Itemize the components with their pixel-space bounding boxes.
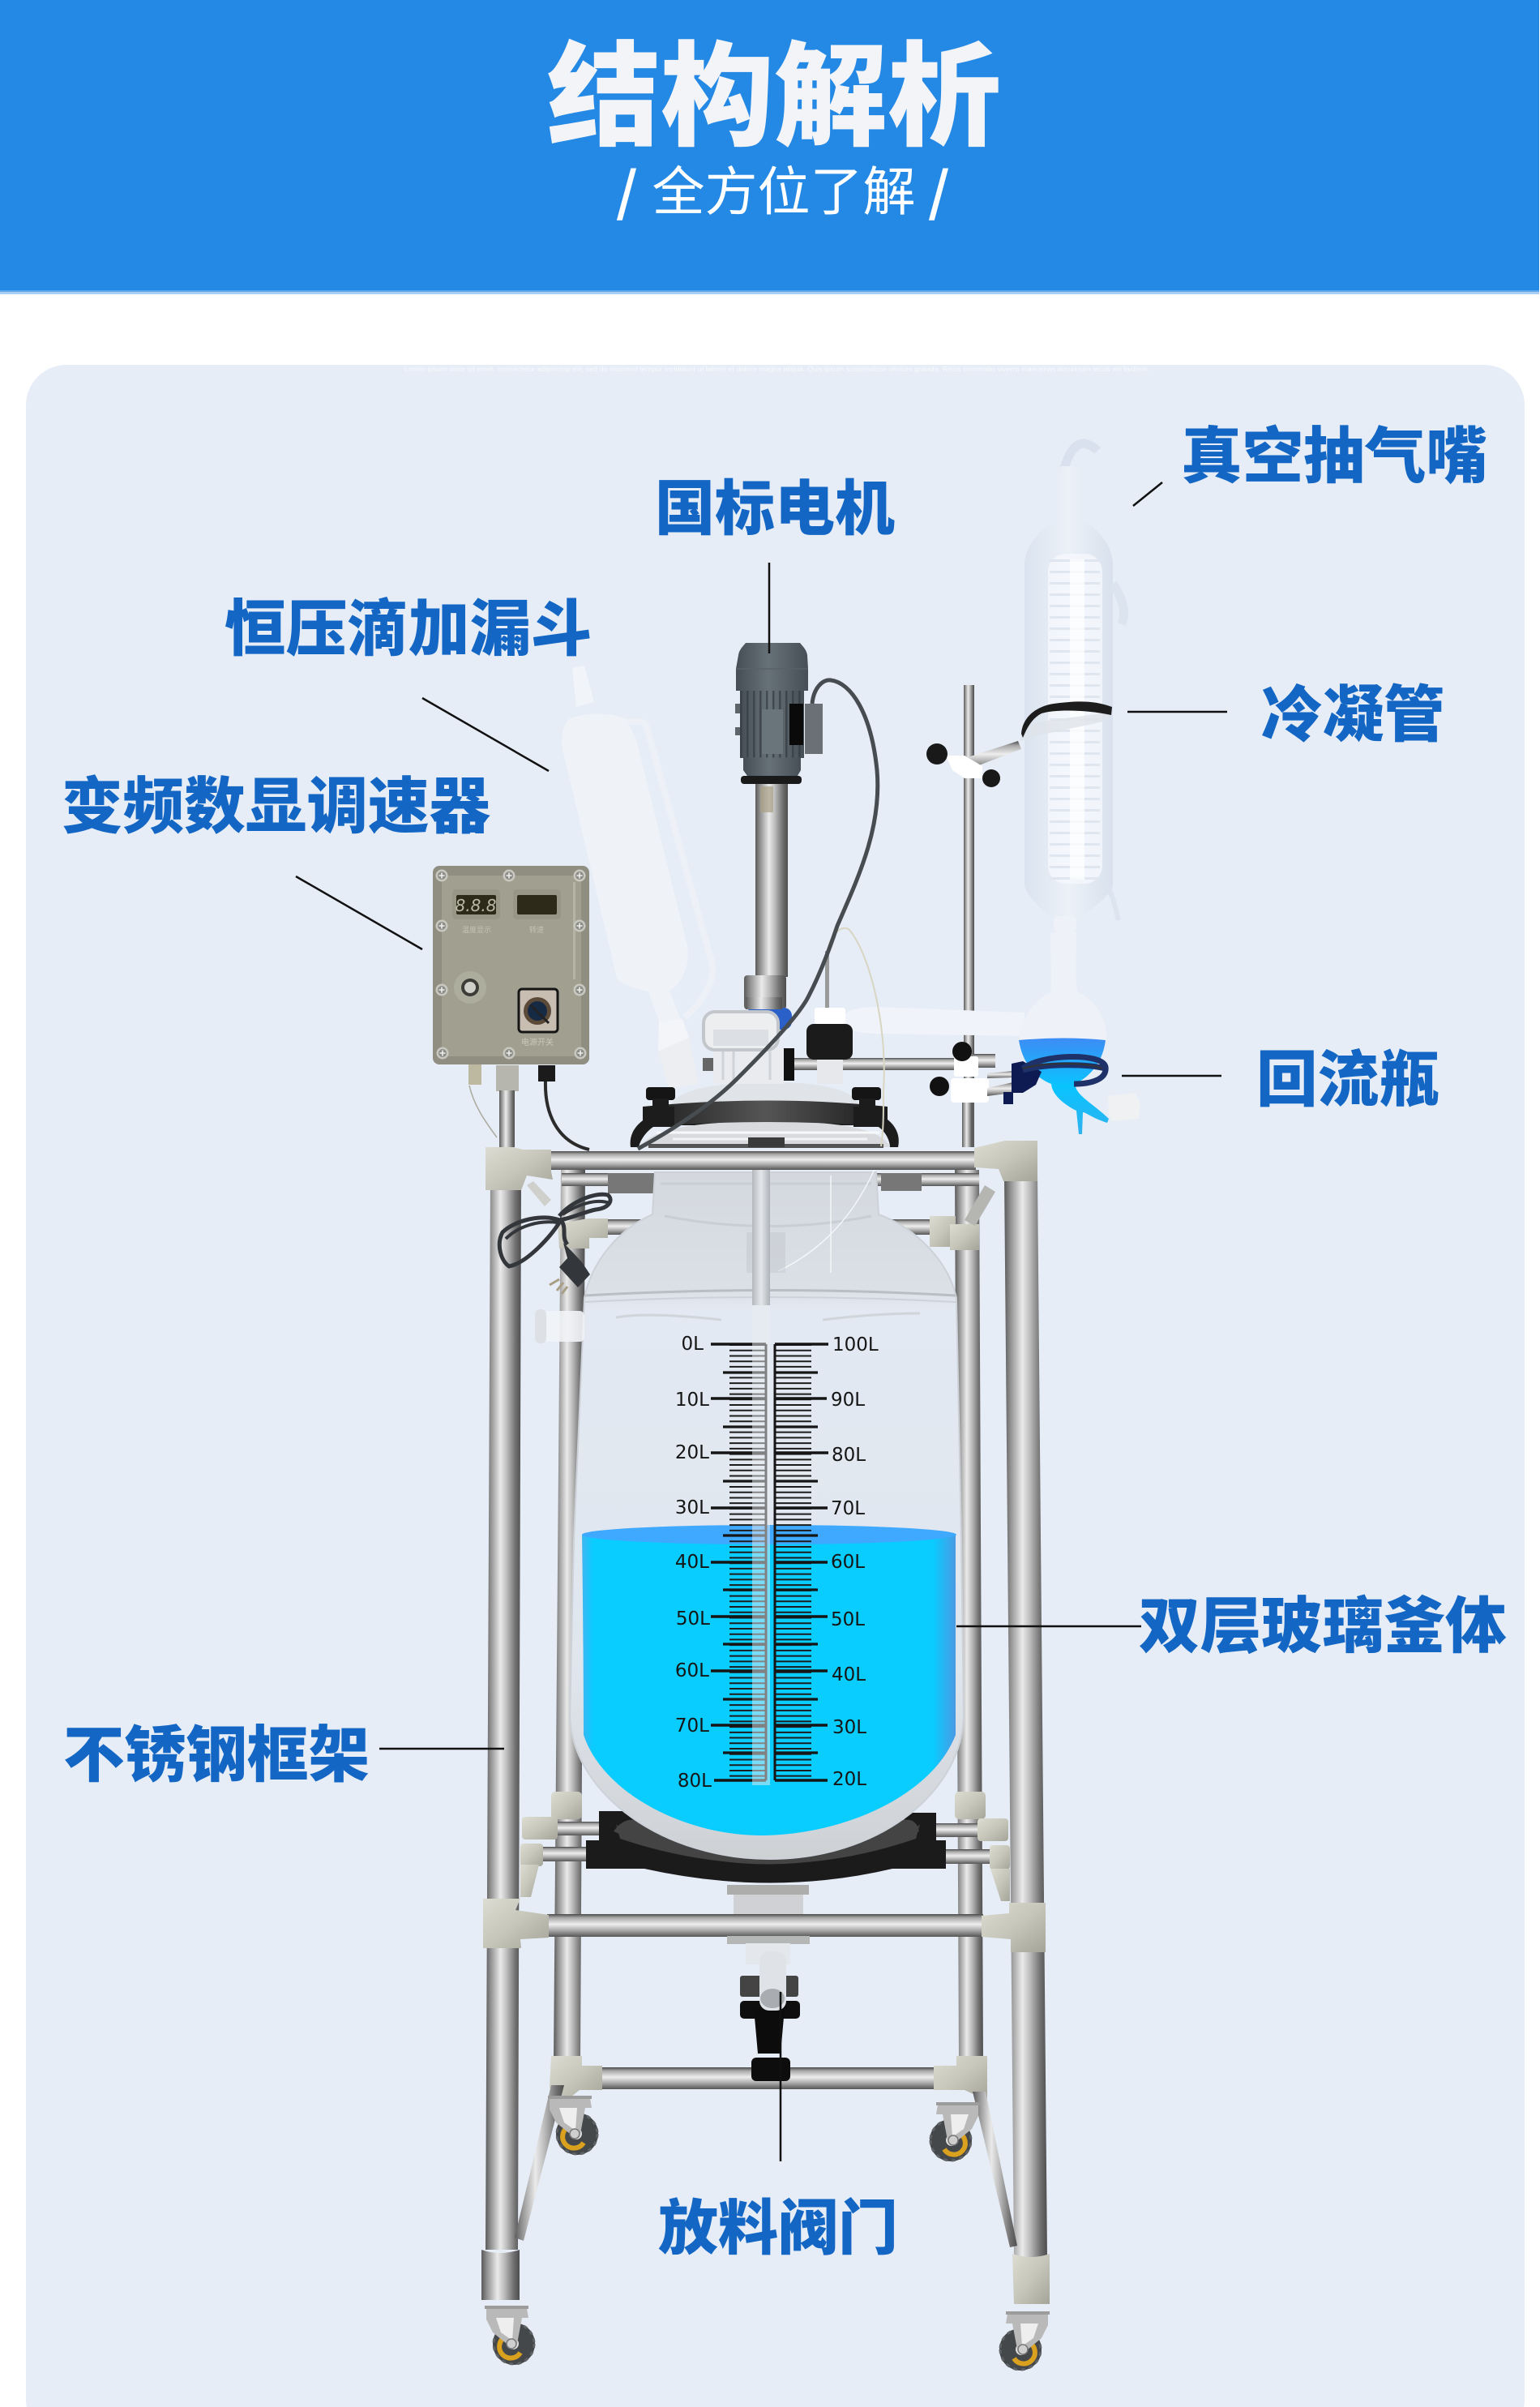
label: 回流瓶: 回流瓶 bbox=[1256, 1047, 1440, 1115]
label: 放料阀门: 放料阀门 bbox=[658, 2195, 898, 2262]
leader line: motor bbox=[768, 563, 770, 653]
panel captions: 温度显示 bbox=[462, 925, 491, 934]
left brace bbox=[515, 2085, 564, 2241]
leader line: valve bbox=[780, 1992, 781, 2161]
reactor: back frame bbox=[520, 1170, 1010, 2062]
label: 不锈钢框架: 不锈钢框架 bbox=[63, 1722, 370, 1790]
condenser coil bbox=[1048, 554, 1102, 884]
reactor: blue liquid bbox=[582, 1525, 956, 1835]
middle right joint bbox=[982, 1903, 1046, 1952]
thermometer port bbox=[806, 928, 884, 1146]
label: 变频数显调速器: 变频数显调速器 bbox=[62, 773, 491, 842]
reflux flask bbox=[842, 916, 1140, 1134]
scale labels right: 100L bbox=[832, 1334, 879, 1356]
leader line: condenser bbox=[1127, 711, 1227, 713]
leader line: vacuum nozzle bbox=[1133, 482, 1162, 506]
title: 结构解析 bbox=[547, 33, 1001, 161]
scale labels right: 60L bbox=[831, 1552, 865, 1573]
reactor: vessel saddle bbox=[586, 1811, 946, 1882]
scale labels left: 60L bbox=[675, 1660, 709, 1681]
lower left joint bbox=[550, 2056, 602, 2100]
middle left joint bbox=[483, 1899, 549, 1948]
scale labels left: 70L bbox=[675, 1715, 709, 1737]
motor shaft bbox=[744, 782, 788, 1009]
label: 双层玻璃釜体: 双层玻璃釜体 bbox=[1139, 1593, 1507, 1661]
temperature digits: 8.8.8 bbox=[456, 896, 496, 915]
motor body bbox=[735, 643, 823, 784]
lower crossbar bbox=[601, 2067, 935, 2089]
top right joint bbox=[974, 1141, 1037, 1181]
motor cable bbox=[638, 680, 878, 1149]
discharge valve bbox=[727, 1885, 810, 2081]
lid clamp band bbox=[643, 1101, 888, 1127]
stirring motor bbox=[735, 643, 823, 1009]
scale labels right: 70L bbox=[831, 1498, 865, 1519]
speed controller box bbox=[433, 866, 589, 1150]
scale labels right: 30L bbox=[832, 1717, 866, 1738]
scale labels left: 10L bbox=[675, 1390, 709, 1411]
scale labels left: 50L bbox=[676, 1608, 710, 1630]
controller connectors bbox=[468, 1064, 589, 1150]
retort stand rod bbox=[964, 685, 974, 1147]
leader line: flask bbox=[1122, 1075, 1221, 1077]
scale labels right: 40L bbox=[832, 1664, 866, 1685]
power plug bbox=[550, 1243, 590, 1294]
left outer leg bbox=[486, 1176, 521, 2250]
constant-pressure dropping funnel bbox=[562, 666, 712, 1089]
left foot collar bbox=[481, 2250, 520, 2300]
subtitle: / bbox=[929, 156, 949, 235]
label: 国标电机: 国标电机 bbox=[655, 475, 895, 542]
scale labels right: 50L bbox=[831, 1609, 865, 1630]
reactor: glass vessel bbox=[535, 1167, 964, 1859]
reactor: central stirring rod bbox=[752, 1167, 770, 1785]
subtitle: / bbox=[617, 156, 637, 235]
leader line: vessel bbox=[956, 1625, 1141, 1627]
leader line: funnel bbox=[422, 698, 549, 771]
middle crossbar bbox=[547, 1914, 983, 1937]
subtitle bbox=[617, 156, 949, 235]
lower right joint bbox=[934, 2056, 987, 2100]
push button bbox=[454, 971, 486, 1004]
right foot collar bbox=[1012, 2254, 1050, 2304]
scale labels left: 40L bbox=[675, 1552, 709, 1573]
scale labels left: 80L bbox=[678, 1771, 712, 1792]
speed controller box: 转速 bbox=[529, 925, 544, 934]
casters bbox=[485, 2096, 1050, 2371]
controller screws bbox=[436, 869, 587, 1059]
scale labels right: 90L bbox=[831, 1390, 865, 1411]
right brace bbox=[973, 2092, 1017, 2247]
rotary switch bbox=[519, 989, 558, 1032]
label: 冷凝管: 冷凝管 bbox=[1261, 682, 1445, 750]
condenser glass tube bbox=[1025, 443, 1124, 920]
scale labels left bbox=[675, 1334, 712, 1792]
top left joint bbox=[486, 1147, 553, 1190]
reactor: volume scale bbox=[675, 1334, 879, 1792]
scale labels left: 0L bbox=[682, 1334, 704, 1355]
scale labels right: 80L bbox=[832, 1445, 866, 1466]
labels and leader lines bbox=[62, 423, 1507, 2262]
label: 恒压滴加漏斗: 恒压滴加漏斗 bbox=[225, 596, 592, 664]
flask clamp bbox=[703, 1042, 1106, 1147]
scale labels right bbox=[831, 1334, 879, 1790]
speed controller box: 电源开关 bbox=[521, 1037, 554, 1047]
right outer leg bbox=[1004, 1176, 1047, 2258]
faint lorem caption: Lorem ipsum dolor sit amet, consectetur adipiscing elit, sed do eiusmod tempor incididunt ut labore et dolore magna aliqua. Quis ipsum suspendisse ultrices gravida. Risus commodo viverra maecenas accumsan lacus vel facilisis. bbox=[404, 366, 1149, 373]
scale labels left: 30L bbox=[675, 1497, 709, 1518]
label: 真空抽气嘴: 真空抽气嘴 bbox=[1181, 423, 1487, 491]
scale labels right: 20L bbox=[832, 1769, 866, 1790]
leader line: frame bbox=[379, 1748, 504, 1750]
reactor lid and necks bbox=[631, 928, 899, 1148]
header band bbox=[0, 0, 1539, 294]
power cord bbox=[499, 1194, 610, 1266]
subtitle: 全方位了解 bbox=[652, 162, 916, 221]
scale labels left: 20L bbox=[675, 1442, 709, 1463]
leader line: controller bbox=[296, 876, 422, 949]
top crossbar bbox=[548, 1151, 976, 1170]
condenser clamp bbox=[926, 701, 1112, 787]
stainless steel frame: front bbox=[481, 1141, 1050, 2304]
